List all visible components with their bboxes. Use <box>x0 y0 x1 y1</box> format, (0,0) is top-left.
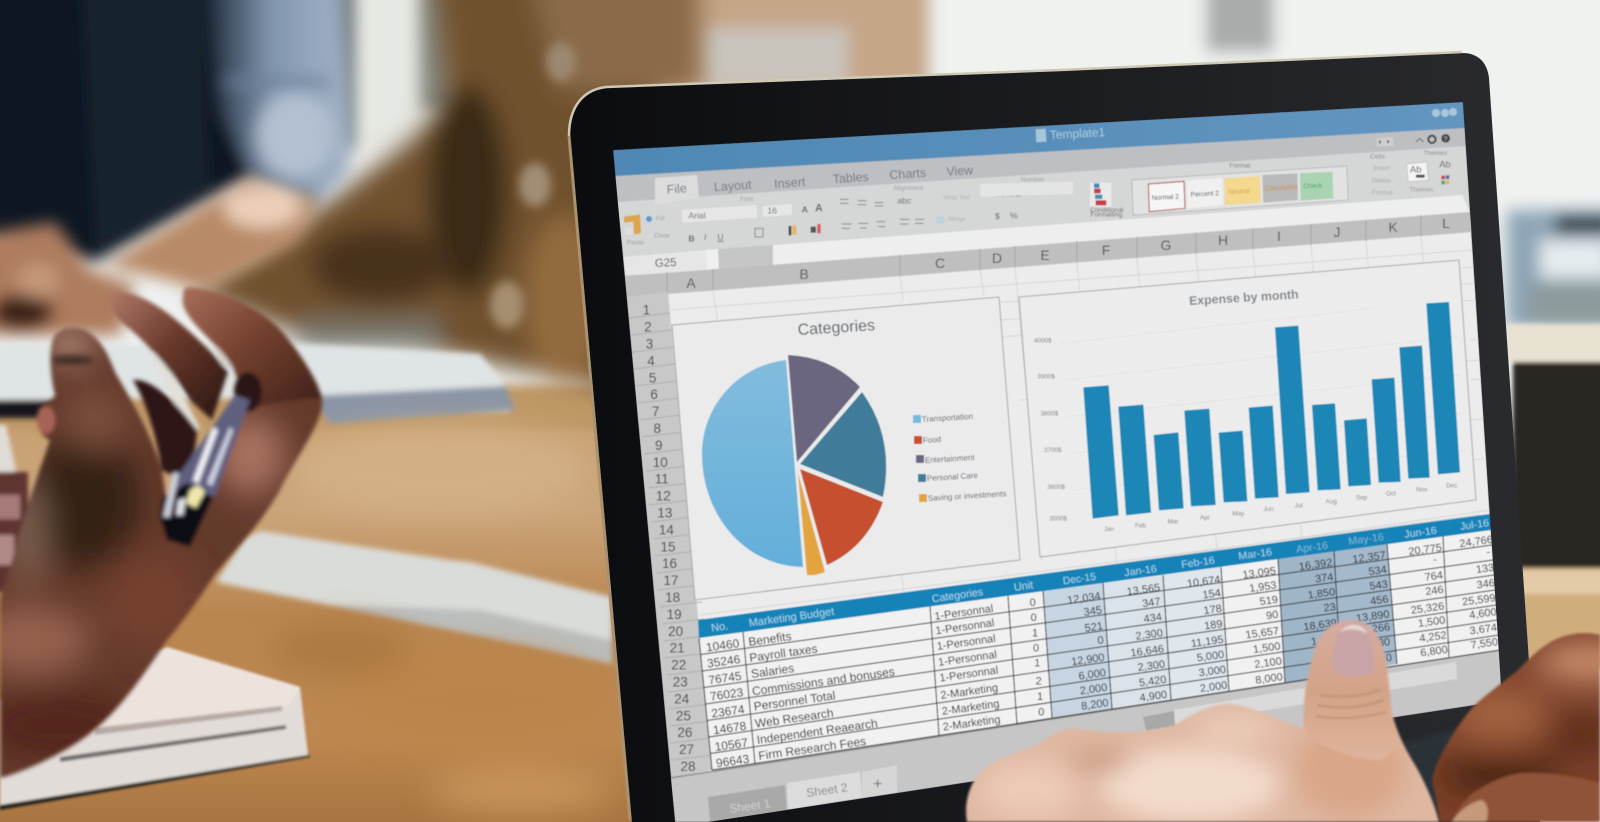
laptop screen: spreadsheet app <box>613 102 1502 822</box>
table units and December values: 345 <box>1083 604 1103 619</box>
ribbon tools left: % <box>1010 210 1018 220</box>
finger ring knuckle <box>37 406 55 434</box>
wooden table <box>0 405 660 822</box>
monthly values: 23 <box>1323 601 1337 615</box>
table units and December values: 0 <box>1033 643 1039 655</box>
theme icon: Ab <box>1410 165 1421 175</box>
blurred white papers <box>0 344 612 664</box>
monthly values: 1,200 <box>1310 633 1339 648</box>
row header strip: 17 <box>663 573 679 588</box>
ribbon tools left: abc <box>897 195 912 205</box>
ribbon <box>617 146 1470 276</box>
bottom scrollbar and sheet tabs band: + <box>873 776 882 793</box>
column header band: J <box>1334 224 1340 240</box>
monthly values: 178 <box>1203 603 1223 617</box>
file tab <box>654 174 699 200</box>
column header band: I <box>1277 228 1281 244</box>
table left columns: No: 23674 <box>710 702 746 721</box>
table units and December values: 0 <box>1097 634 1104 647</box>
row header strip <box>627 292 713 778</box>
row header strip: 16 <box>662 556 677 571</box>
help and settings icons: ? <box>1444 136 1448 143</box>
monthly values: 2,300 <box>1135 627 1164 643</box>
table units and December values: 12,900 <box>1070 652 1105 668</box>
table left columns: No: 10567 <box>714 735 749 754</box>
table units and December values: 521 <box>1084 620 1104 635</box>
bottom scrollbar and sheet tabs band: Sheet 2 <box>805 780 849 800</box>
monthly values: 5,420 <box>1138 674 1167 689</box>
monthly values: 13,890 <box>1355 609 1390 625</box>
blurred forearm and far hand <box>0 178 318 335</box>
shadowed inner finger <box>133 380 197 480</box>
row header strip: 1 <box>643 303 650 318</box>
pie legend <box>913 412 1007 503</box>
blurred brown sweater <box>190 0 700 410</box>
monthly values: 2,300 <box>1137 659 1166 674</box>
table units and December values: 1 <box>1037 691 1043 703</box>
row header strip: 14 <box>659 522 674 537</box>
monthly values: 3,000 <box>1198 664 1227 679</box>
theme icon: Ab <box>1439 159 1451 169</box>
y axis labels: 3600$ <box>1047 484 1065 491</box>
style gallery and theme tools <box>980 134 1451 219</box>
monthly values: 534 <box>1368 564 1388 578</box>
ribbon tools left: Wrap Text <box>943 195 970 201</box>
name box: G25 <box>655 257 677 270</box>
monthly values: 519 <box>1259 594 1279 608</box>
row header strip: 27 <box>679 742 694 757</box>
x axis labels: Dec <box>1446 483 1457 490</box>
column header band: L <box>1442 215 1450 231</box>
table left columns: categories: 2-Marketing <box>942 714 1001 734</box>
bottom scrollbar and sheet tabs band <box>670 648 1502 822</box>
ribbon tools left: Font <box>740 196 753 203</box>
pie legend: Saving or investments <box>928 489 1007 503</box>
row header strip: 4 <box>647 353 655 368</box>
x axis labels: Feb <box>1135 522 1146 529</box>
ribbon tools left: U <box>717 232 724 242</box>
monthly values: 3,674 <box>1469 622 1498 637</box>
ribbon tools left: Merge <box>948 217 966 223</box>
style gallery and theme tools: Calculation <box>1265 184 1298 193</box>
monthly values: 4,600 <box>1468 606 1497 622</box>
row header strip: 24 <box>674 691 690 706</box>
index finger <box>111 292 228 420</box>
monthly values: 189 <box>1203 618 1223 632</box>
row header strip: 23 <box>673 674 688 690</box>
blurred window and wall <box>336 0 1600 220</box>
row header strip: 26 <box>677 725 692 740</box>
bezel silver edge <box>569 52 1462 136</box>
pie chart <box>702 355 886 575</box>
row header strip: 5 <box>649 370 656 385</box>
bars <box>1083 302 1460 519</box>
header labels left: No. <box>710 620 729 635</box>
table units and December values: 6,000 <box>1078 667 1107 683</box>
monthly values: 456 <box>1369 594 1389 608</box>
table units and December values: 1 <box>1032 628 1038 640</box>
header labels left: Dec-15 <box>1062 572 1097 587</box>
row header strip: 7 <box>652 404 659 419</box>
ribbon tools left: Number <box>1021 177 1045 184</box>
table units and December values: 1 <box>1034 658 1040 670</box>
ribbon tools left: I <box>704 232 707 242</box>
table units and December values: 12,034 <box>1066 590 1101 607</box>
coffee cup and right table <box>1505 324 1600 668</box>
ribbon tools left: $ <box>995 211 1000 221</box>
header labels right <box>1124 517 1490 579</box>
monthly values: 1,500 <box>1417 615 1446 630</box>
table left columns: categories: 1-Personnal <box>935 617 995 637</box>
formula bar <box>773 195 1470 265</box>
x axis labels: Mar <box>1168 518 1179 525</box>
ribbon tools left: General <box>995 190 1021 199</box>
pen <box>160 395 250 547</box>
table left columns: names: Benefits <box>747 629 792 649</box>
row header strip: 19 <box>667 607 682 622</box>
header labels right: Mar-16 <box>1238 546 1273 563</box>
laptop bezel <box>569 52 1540 822</box>
monthly values: 20,775 <box>1408 542 1443 558</box>
x axis labels: May <box>1232 510 1245 517</box>
row header strip: 15 <box>660 539 676 554</box>
ribbon tools left: 16 <box>767 205 777 215</box>
style gallery and theme tools: Neutral <box>1228 188 1250 196</box>
row header strip: 10 <box>653 455 668 470</box>
bottom scrollbar and sheet tabs band: Sheet 1 <box>728 796 772 816</box>
table grid lines <box>701 545 1500 770</box>
monthly values: 543 <box>1369 579 1389 593</box>
column header band: H <box>1218 232 1228 248</box>
column header band: D <box>992 250 1002 266</box>
monthly values: 1,953 <box>1248 580 1277 595</box>
right hand: pale hand with pointing thumb <box>960 610 1450 822</box>
monthly values: 4,900 <box>1139 689 1168 704</box>
monthly values: 6,800 <box>1420 644 1449 659</box>
chair behind the laptop <box>1507 210 1600 328</box>
monthly values: - <box>1486 546 1491 558</box>
monthly values: 5,000 <box>1196 649 1225 664</box>
monthly values: 10,674 <box>1186 574 1221 590</box>
other fingers at left edge <box>0 425 28 592</box>
monthly values: 15,657 <box>1245 625 1280 641</box>
bar chart title: Expense by month <box>1189 287 1299 308</box>
monthly values: 25,599 <box>1461 592 1496 608</box>
table left columns: names: Independent Reaearch <box>756 716 879 747</box>
header labels left: Categories <box>931 586 984 605</box>
header labels left: Marketing Budget <box>748 606 835 630</box>
table body <box>699 530 1500 770</box>
sweater buttons <box>490 42 576 329</box>
column header band: K <box>1388 219 1398 235</box>
style gallery and theme tools: Normal 2 <box>1152 194 1179 202</box>
table units and December values: 2,000 <box>1079 682 1108 697</box>
monthly values: 347 <box>1141 596 1161 610</box>
thumb <box>1304 620 1397 760</box>
monthly values: 346 <box>1476 577 1496 591</box>
monthly values: 2,100 <box>1254 656 1283 671</box>
x axis labels: Oct <box>1386 490 1396 497</box>
ribbon tools left: B <box>688 233 695 243</box>
table left columns: names: Web Research <box>754 706 834 731</box>
y axis labels: 3800$ <box>1041 410 1059 417</box>
column header band: C <box>935 255 945 271</box>
shaded columns <box>1043 583 1112 718</box>
paper glimpse between fingers <box>150 350 200 434</box>
row header strip: 2 <box>644 320 652 335</box>
row header strip: 18 <box>665 590 680 605</box>
left hand holding pen <box>0 287 340 790</box>
ribbon tools left: Arial <box>688 210 706 220</box>
panel: Expense by month bar chart <box>1019 260 1476 557</box>
x axis labels: Jul <box>1295 502 1303 509</box>
ribbon tab labels: Layout <box>714 178 752 194</box>
sheet grid lines <box>668 236 1494 615</box>
ribbon tools left: Paste <box>627 239 644 246</box>
ribbon tabs band <box>615 128 1466 204</box>
style gallery and theme tools: Themes <box>1409 187 1434 194</box>
table left columns: No: 14678 <box>712 719 747 737</box>
ribbon tools left: Clear <box>654 232 671 239</box>
pie legend: Food <box>923 435 941 445</box>
table units and December values: 0 <box>1030 597 1036 609</box>
column header band: G <box>1161 237 1171 253</box>
dark junction of pen and fingers <box>234 372 262 412</box>
table left columns: categories: 1-Personnal <box>934 603 994 623</box>
ribbon tools left: A <box>815 203 823 215</box>
y axis labels: 3900$ <box>1037 373 1055 380</box>
table left columns: No: 76745 <box>707 669 743 687</box>
theme icon <box>1407 159 1451 184</box>
table left columns: No: 96643 <box>715 752 750 770</box>
monthly values: 12,357 <box>1352 550 1387 566</box>
row header strip: 28 <box>680 759 696 774</box>
monthly values: 133 <box>1475 562 1495 576</box>
right hand: dark fingers <box>1425 620 1600 822</box>
y axis labels: 3700$ <box>1044 447 1062 454</box>
row header strip: 20 <box>668 624 683 639</box>
conditional formatting icon <box>1090 183 1111 207</box>
monthly values: 1,850 <box>1307 586 1336 602</box>
row header strip: 3 <box>646 336 653 352</box>
monthly values: 24,766 <box>1459 534 1494 550</box>
table left columns: names: Personnel Total <box>753 688 836 714</box>
table left columns: categories <box>934 603 1001 734</box>
header labels right: Feb-16 <box>1180 555 1216 571</box>
monthly values: 8,000 <box>1255 671 1284 687</box>
ribbon tools left: Fill <box>656 216 665 223</box>
x axis labels: Jan <box>1104 526 1115 533</box>
monthly values: 1,500 <box>1252 641 1281 656</box>
x axis labels: Aug <box>1326 498 1337 505</box>
monthly values: 1,266 <box>1362 621 1391 637</box>
header labels right: Jun-16 <box>1404 525 1438 541</box>
column header band <box>625 212 1473 297</box>
laptop keyboard deck <box>1395 722 1490 815</box>
monthly values <box>1126 534 1499 704</box>
header labels right: Jan-16 <box>1124 563 1158 579</box>
monthly values: 16,646 <box>1130 643 1165 659</box>
style gallery and theme tools: Formatting <box>1091 212 1123 219</box>
monthly values: 13,095 <box>1242 565 1277 581</box>
ribbon tools left <box>624 177 1045 246</box>
table left columns: names <box>747 629 896 763</box>
row header strip: 22 <box>671 658 686 673</box>
column header band: B <box>799 266 809 282</box>
ribbon tab labels: File <box>666 181 687 197</box>
monthly values: 764 <box>1424 570 1444 584</box>
style gallery and theme tools: Delete <box>1372 178 1391 185</box>
ribbon tab labels: Insert <box>774 175 806 191</box>
monthly values: 16,392 <box>1298 557 1333 573</box>
monthly values: 18,639 <box>1303 617 1338 633</box>
table left columns: categories: 1-Personnal <box>937 649 998 669</box>
table left columns: No: 35246 <box>706 652 741 671</box>
thumb nail <box>1332 621 1374 676</box>
header labels right: May-16 <box>1348 531 1385 548</box>
row header strip: 6 <box>650 387 658 402</box>
table left columns: No: 76023 <box>709 685 744 704</box>
monthly values: 2,000 <box>1199 680 1228 695</box>
table left columns: categories: 2-Marketing <box>941 698 1000 718</box>
panel: Categories pie chart <box>672 297 1020 600</box>
row header strip: 12 <box>656 489 671 504</box>
style gallery and theme tools: Format <box>1372 190 1393 197</box>
monthly values: 7,550 <box>1470 636 1499 652</box>
style gallery and theme tools: Cells <box>1370 153 1385 160</box>
lower thumb <box>1452 773 1600 822</box>
monthly values: 30 <box>1377 636 1391 650</box>
ribbon tab labels: Charts <box>889 166 927 182</box>
header labels right: Apr-16 <box>1295 540 1329 556</box>
x axis labels: Jun <box>1263 506 1274 513</box>
monthly values: 90 <box>1265 609 1279 622</box>
monthly values: 11,195 <box>1190 634 1224 650</box>
pie legend: Entertainment <box>925 453 976 465</box>
ribbon tools left: Alignment <box>893 185 923 192</box>
row header strip: 21 <box>670 641 685 656</box>
pie legend: Transportation <box>922 412 973 424</box>
header labels right: Jul-16 <box>1459 517 1490 533</box>
table left columns: No <box>705 636 750 770</box>
table left columns: names: Payroll taxes <box>748 642 818 665</box>
monthly values: 25,326 <box>1410 601 1445 617</box>
x axis labels: Apr <box>1200 514 1210 521</box>
monthly values: 374 <box>1314 571 1334 585</box>
row header strip: 25 <box>676 708 691 723</box>
title bar: Template1 <box>1049 125 1106 142</box>
table left columns: names: Commissions and bonuses <box>751 664 896 698</box>
row header strip: 11 <box>655 472 669 487</box>
help and settings icons <box>1377 134 1450 147</box>
monthly values: - <box>1432 554 1438 566</box>
table far edge <box>0 385 660 430</box>
blurred dark shirt of left person <box>0 0 350 262</box>
table units and December values: 2 <box>1036 675 1042 687</box>
style gallery and theme tools: Percent 2 <box>1190 190 1220 199</box>
ribbon tools left: A <box>802 205 809 215</box>
table left columns: names: Firm Research Fees <box>757 734 867 763</box>
style gallery and theme tools: Insert <box>1373 165 1390 172</box>
header labels left <box>710 572 1097 635</box>
row header strip: 8 <box>653 421 661 436</box>
wood tones <box>270 425 610 814</box>
monthly values: 154 <box>1202 587 1222 601</box>
notebook <box>0 647 310 810</box>
row header strip: 9 <box>655 438 662 453</box>
pie legend: Personal Care <box>927 471 979 483</box>
table header <box>698 514 1491 638</box>
table units and December values <box>1030 590 1109 719</box>
middle finger <box>183 287 322 415</box>
table left columns: categories: 2-Marketing <box>940 682 999 702</box>
x axis labels <box>1104 483 1457 533</box>
gridlines <box>1060 308 1467 490</box>
table left columns: names: Salaries <box>750 661 795 681</box>
table left columns: categories: 1-Personnal <box>936 633 996 653</box>
style gallery and theme tools: Check <box>1303 182 1323 190</box>
name box <box>623 245 773 275</box>
header labels left: Unit <box>1013 579 1034 594</box>
row header strip: 13 <box>657 506 672 520</box>
monthly values: 4,252 <box>1419 630 1448 645</box>
ribbon tab labels <box>667 166 974 194</box>
x axis labels: Sep <box>1356 494 1368 501</box>
monthly values: 0 <box>1385 652 1393 664</box>
style gallery and theme tools: Format <box>1229 163 1251 170</box>
title bar <box>613 102 1465 177</box>
table left columns: categories: 1-Personnal <box>939 665 999 685</box>
monthly values: 246 <box>1425 584 1444 598</box>
table units and December values: 0 <box>1038 707 1044 719</box>
monthly values: 13,565 <box>1126 582 1161 598</box>
ribbon tab labels: View <box>946 163 975 179</box>
y axis labels: 3500$ <box>1049 516 1067 523</box>
style gallery and theme tools: Themes <box>1423 150 1448 157</box>
y axis labels <box>1034 338 1067 523</box>
style gallery and theme tools: Conditional <box>1090 207 1124 214</box>
column header band: F <box>1102 242 1110 258</box>
x axis labels: Nov <box>1416 487 1428 494</box>
column header band: A <box>686 275 696 291</box>
palm and thumb <box>0 320 340 790</box>
ribbon tab labels: Tables <box>832 170 869 186</box>
monthly values: 434 <box>1143 611 1163 625</box>
column header band: E <box>1040 247 1050 263</box>
table units and December values: 8,200 <box>1081 697 1109 713</box>
table: marketing budget <box>698 514 1500 770</box>
y axis labels: 4000$ <box>1034 338 1052 345</box>
table units and December values: 0 <box>1031 612 1037 624</box>
table left columns: No: 10460 <box>705 636 740 655</box>
thumb creases <box>1316 690 1386 718</box>
pie title: Categories <box>797 317 875 339</box>
